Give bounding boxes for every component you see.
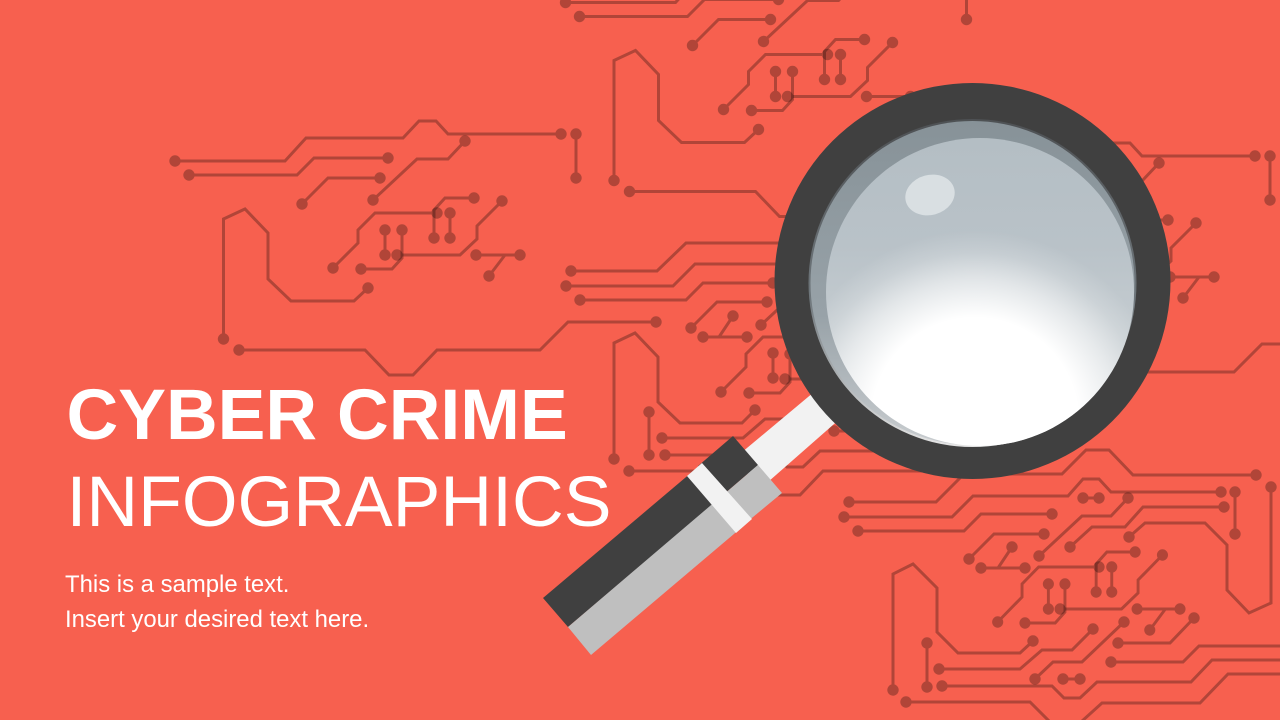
subtitle text block: This is a sample text.: [65, 571, 289, 598]
subtitle text block: Insert your desired text here.: [65, 606, 369, 633]
icon: handle grip: [543, 436, 782, 655]
icon: lens glass: [808, 119, 1136, 447]
magnifying glass: [543, 83, 1170, 655]
icon: lens ring: [774, 83, 1170, 479]
circuit traces: lower right inner block: [998, 552, 1186, 636]
circuit traces: left block: [175, 121, 656, 375]
circuit traces: top block: [566, 0, 966, 216]
icon: lens highlight: [901, 169, 959, 221]
subtitle text block: [65, 571, 369, 633]
circuit traces: right block: [994, 143, 1280, 372]
icon: handle stem: [735, 387, 850, 489]
title: cyber crime: CYBER CRIME: [66, 375, 568, 455]
circuit traces: lower right block: [844, 450, 1280, 720]
title: infographics: INFOGRAPHICS: [66, 462, 611, 542]
circuit traces: centre block: [566, 243, 1000, 495]
